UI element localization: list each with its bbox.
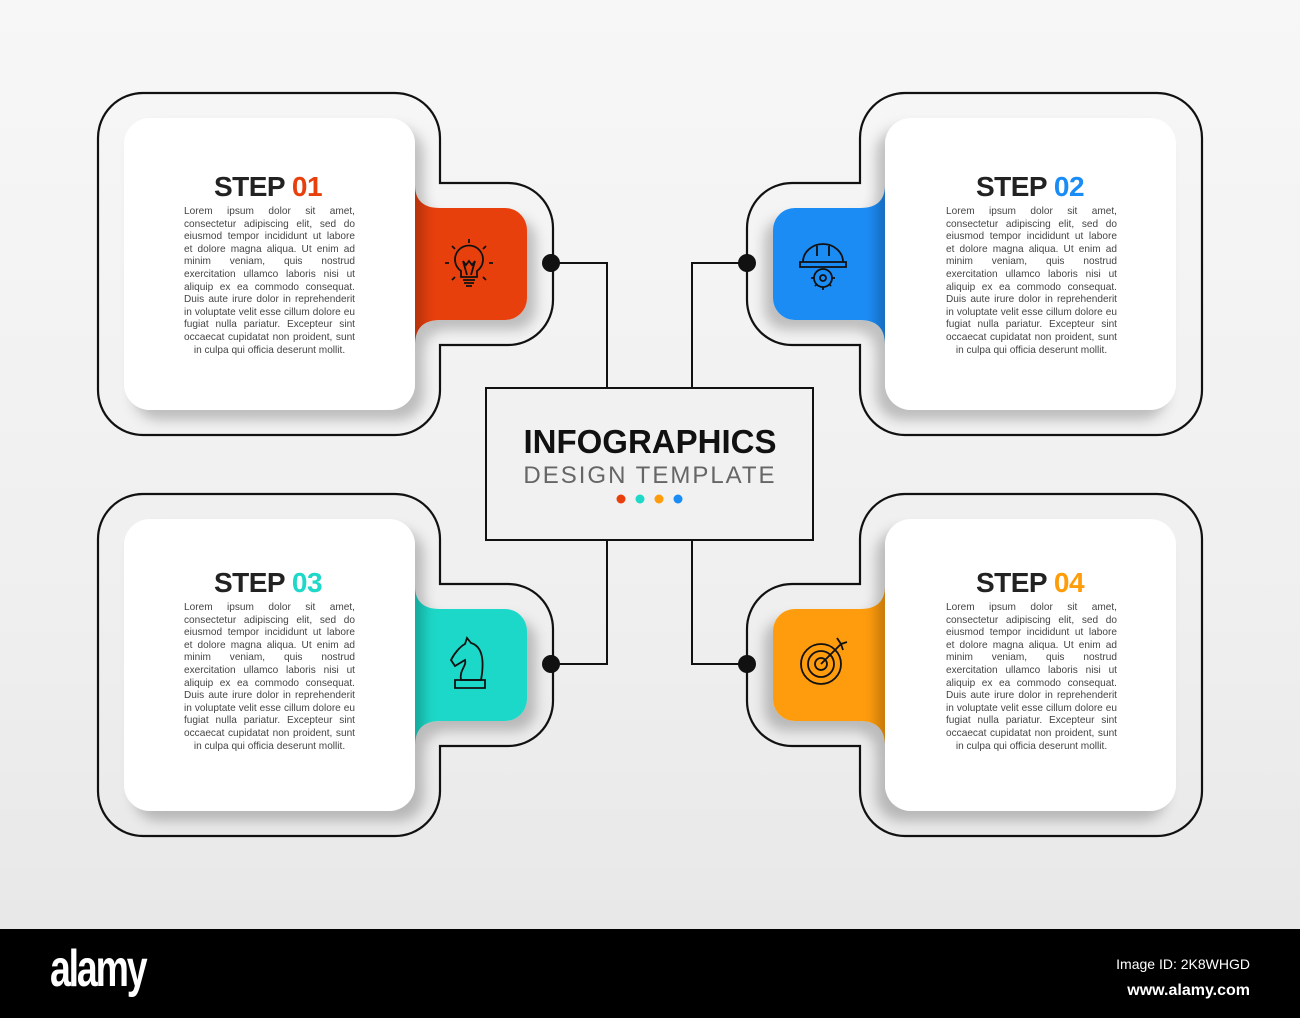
step 03 title: STEP 03 — [214, 567, 322, 598]
center box: INFOGRAPHICS — [523, 423, 777, 460]
icon: helmet gear — [800, 244, 846, 290]
panel: step 03 — [98, 494, 560, 836]
icon: light bulb — [445, 239, 493, 286]
center box: DESIGN TEMPLATE — [523, 462, 777, 489]
step 03 text: Lorem ipsum dolor sit amet, consectetur adipiscing elit, sed do eiusmod tempor incididunt ut labore et dolore magna aliqua. Ut enim ad minim veniam, quis nostrud exercitation ullamco laboris nisi ut aliquip ex ea commodo consequat. Duis aute irure dolor in reprehenderit in voluptate velit esse cillum dolore eu fugiat nulla pariatur. Excepteur sint occaecat cupidatat non proident, sunt in culpa qui officia deserunt mollit. — [184, 602, 355, 752]
step 04 text: Lorem ipsum dolor sit amet, consectetur adipiscing elit, sed do eiusmod tempor incididunt ut labore et dolore magna aliqua. Ut enim ad minim veniam, quis nostrud exercitation ullamco laboris nisi ut aliquip ex ea commodo consequat. Duis aute irure dolor in reprehenderit in voluptate velit esse cillum dolore eu fugiat nulla pariatur. Excepteur sint occaecat cupidatat non proident, sunt in culpa qui officia deserunt mollit. — [946, 602, 1117, 752]
panel: step 02 — [738, 93, 1202, 435]
step 04 title: STEP 04 — [976, 567, 1084, 598]
step 01 title: STEP 01 — [214, 171, 322, 202]
center box — [486, 388, 813, 540]
panel: step 04 — [738, 494, 1202, 836]
step 01 text: Lorem ipsum dolor sit amet, consectetur adipiscing elit, sed do eiusmod tempor incididunt ut labore et dolore magna aliqua. Ut enim ad minim veniam, quis nostrud exercitation ullamco laboris nisi ut aliquip ex ea commodo consequat. Duis aute irure dolor in reprehenderit in voluptate velit esse cillum dolore eu fugiat nulla pariatur. Excepteur sint occaecat cupidatat non proident, sunt in culpa qui officia deserunt mollit. — [184, 206, 355, 356]
icon: chess knight — [451, 638, 485, 688]
footer bar: Image ID: 2K8WHGD — [1116, 956, 1250, 972]
footer bar — [0, 929, 1300, 1018]
panel: step 01 — [98, 93, 560, 435]
icon: target — [801, 638, 847, 684]
connector lines — [551, 263, 747, 664]
footer bar: alamy — [50, 940, 145, 998]
step 02 title: STEP 02 — [976, 171, 1084, 202]
step 02 text: Lorem ipsum dolor sit amet, consectetur adipiscing elit, sed do eiusmod tempor incididunt ut labore et dolore magna aliqua. Ut enim ad minim veniam, quis nostrud exercitation ullamco laboris nisi ut aliquip ex ea commodo consequat. Duis aute irure dolor in reprehenderit in voluptate velit esse cillum dolore eu fugiat nulla pariatur. Excepteur sint occaecat cupidatat non proident, sunt in culpa qui officia deserunt mollit. — [946, 206, 1117, 356]
footer bar: www.alamy.com — [1127, 982, 1250, 999]
